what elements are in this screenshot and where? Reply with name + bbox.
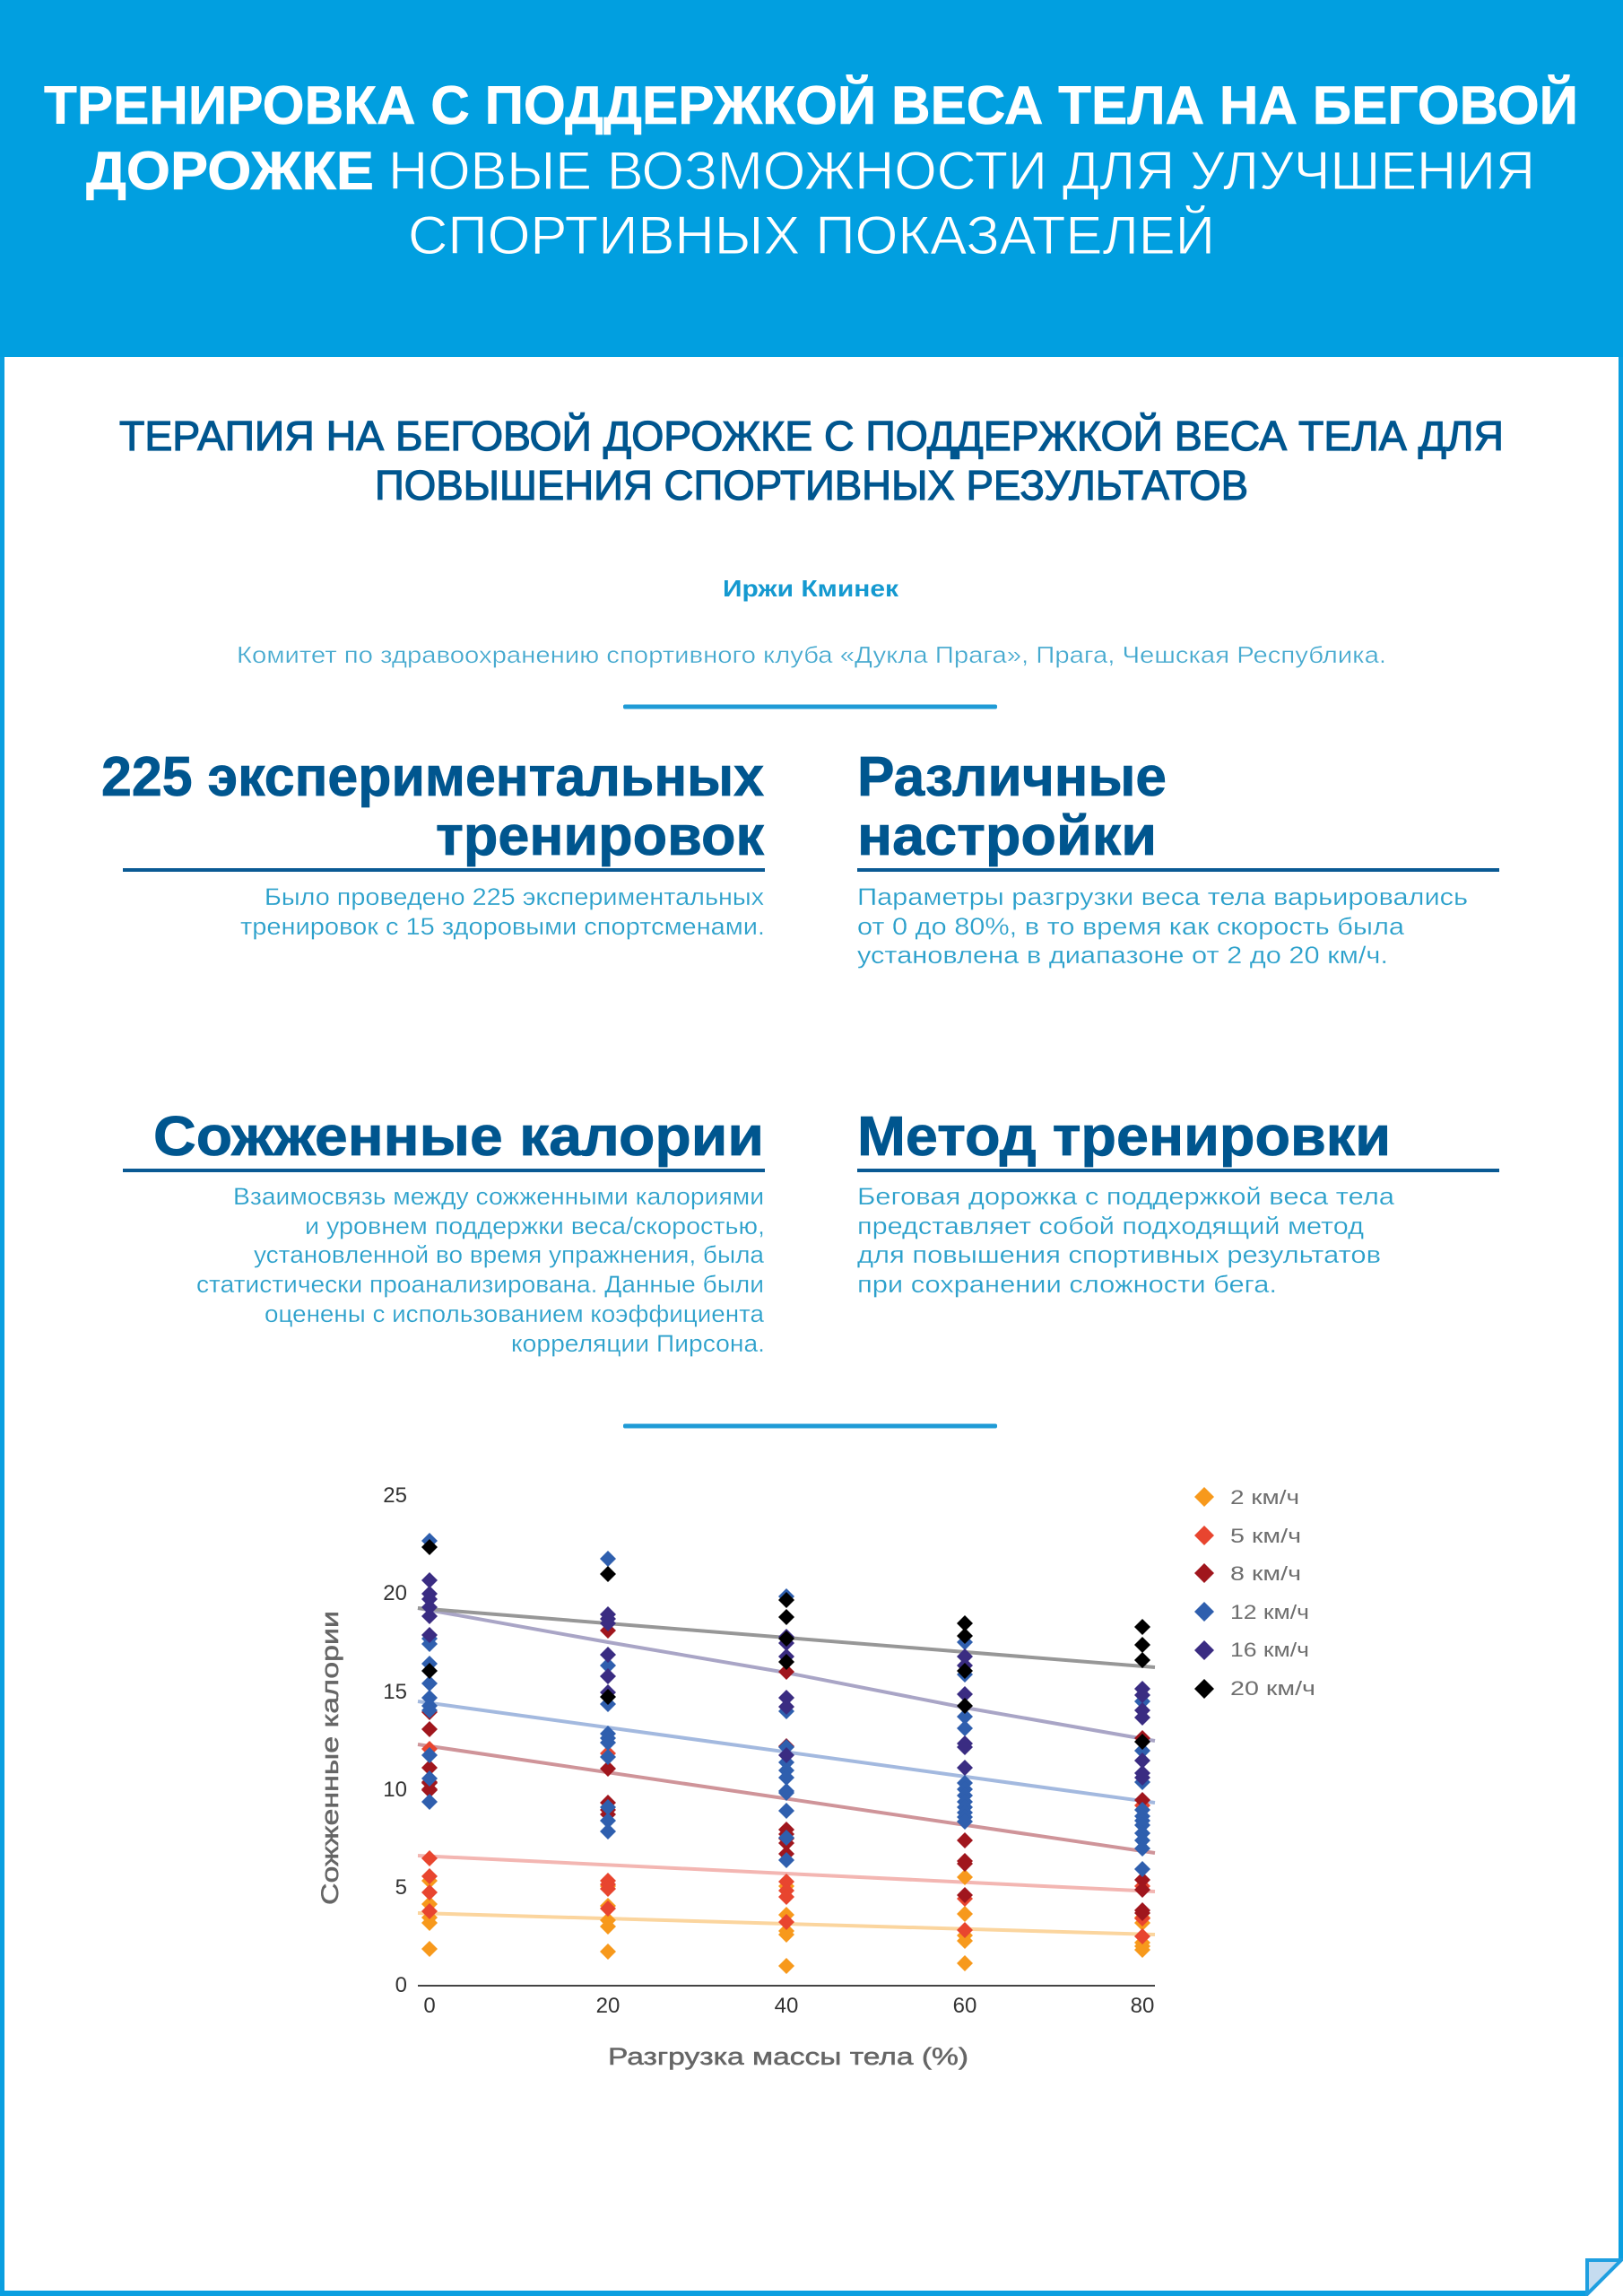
- heading: Различные: [857, 746, 1167, 808]
- x axis line: [418, 1985, 1155, 1987]
- text block: установленной во время упражнения, была: [254, 1241, 765, 1268]
- series: 5 km/h: [421, 1741, 1150, 1944]
- y axis ticks: 15: [383, 1680, 407, 1704]
- text block: [196, 1183, 765, 1357]
- x axis ticks: 80: [1131, 1994, 1154, 2018]
- legend: 12 км/ч: [1230, 1601, 1309, 1623]
- heading: настройки: [857, 805, 1157, 867]
- panel: training method: [857, 1106, 1499, 1298]
- legend: 8 км/ч: [1230, 1562, 1301, 1585]
- affiliation: Комитет по здравоохранению спортивного клуба «Дукла Прага», Прага, Чешская Республика.: [237, 641, 1386, 668]
- text block: оценены с использованием коэффициента: [265, 1300, 765, 1327]
- title: НОВЫЕ ВОЗМОЖНОСТИ ДЛЯ УЛУЧШЕНИЯ: [388, 141, 1535, 201]
- title: СПОРТИВНЫХ ПОКАЗАТЕЛЕЙ: [408, 205, 1215, 265]
- title: [44, 75, 1578, 265]
- text block: Было проведено 225 экспериментальных: [265, 883, 765, 910]
- subtitle: [119, 413, 1504, 509]
- text block: Параметры разгрузки веса тела варьировались: [857, 883, 1468, 910]
- heading: Сожженные калории: [153, 1106, 764, 1168]
- icon: folded page corner: [1587, 2260, 1621, 2294]
- heading: Метод тренировки: [857, 1106, 1391, 1168]
- text block: для повышения спортивных результатов: [857, 1241, 1381, 1268]
- x axis ticks: 60: [953, 1994, 976, 2018]
- y axis ticks: 10: [383, 1778, 407, 1802]
- legend: 16 км/ч: [1230, 1639, 1309, 1661]
- series: 8 km/h: [421, 1622, 1150, 1921]
- x axis ticks: 0: [423, 1994, 436, 2018]
- text block: при сохранении сложности бега.: [857, 1271, 1277, 1298]
- x axis ticks: 40: [775, 1994, 798, 2018]
- author: Иржи Кминек: [723, 575, 899, 602]
- text block: тренировок с 15 здоровыми спортсменами.: [240, 913, 765, 940]
- title: ДОРОЖКЕ: [86, 141, 374, 201]
- y axis ticks: 5: [395, 1875, 407, 1900]
- panel: experimental sessions: [101, 746, 765, 940]
- text block: установлена в диапазоне от 2 до 20 км/ч.: [857, 942, 1388, 969]
- text block: представляет собой подходящий метод: [857, 1213, 1364, 1239]
- panel: burned calories: [123, 1106, 765, 1357]
- scatter chart: [317, 1483, 1155, 2070]
- y axis ticks: [383, 1483, 407, 1997]
- text block: статистически проанализирована. Данные были: [196, 1271, 764, 1298]
- subtitle: ТЕРАПИЯ НА БЕГОВОЙ ДОРОЖКЕ С ПОДДЕРЖКОЙ ВЕСА ТЕЛА ДЛЯ: [119, 413, 1504, 459]
- legend: 20 км/ч: [1230, 1677, 1315, 1700]
- heading: [101, 746, 765, 867]
- y axis ticks: 0: [395, 1973, 407, 1997]
- text block: корреляции Пирсона.: [511, 1330, 765, 1357]
- legend: 5 км/ч: [1230, 1525, 1301, 1547]
- legend: 2 км/ч: [1230, 1486, 1299, 1509]
- series: 16 km/h: [421, 1572, 1150, 1786]
- heading: тренировок: [436, 805, 765, 867]
- y axis title: Сожженные калории: [317, 1611, 343, 1905]
- text block: от 0 до 80%, в то время как скорость была: [857, 913, 1405, 940]
- series: 12 km/h: [421, 1533, 1150, 1877]
- text block: и уровнем поддержки веса/скоростью,: [305, 1213, 765, 1239]
- title: ТРЕНИРОВКА С ПОДДЕРЖКОЙ ВЕСА ТЕЛА НА БЕГОВОЙ: [44, 75, 1578, 135]
- text block: [857, 883, 1468, 969]
- heading: [857, 746, 1167, 867]
- text block: [857, 1183, 1395, 1298]
- subtitle: ПОВЫШЕНИЯ СПОРТИВНЫХ РЕЗУЛЬТАТОВ: [375, 462, 1248, 509]
- trend lines: [418, 1608, 1155, 1935]
- series: 20 km/h: [421, 1539, 1150, 1750]
- header banner: [0, 0, 1623, 357]
- panel: various settings: [857, 746, 1499, 969]
- text block: [240, 883, 765, 940]
- y axis ticks: 20: [383, 1581, 407, 1605]
- x axis ticks: 20: [596, 1994, 620, 2018]
- x axis ticks: [423, 1994, 1154, 2018]
- legend: [1194, 1486, 1315, 1700]
- x axis title: Разгрузка массы тела (%): [608, 2043, 968, 2070]
- y axis ticks: 25: [383, 1483, 407, 1508]
- text block: Взаимосвязь между сожженными калориями: [233, 1183, 764, 1210]
- series: 2 km/h: [421, 1869, 1150, 1974]
- heading: 225 экспериментальных: [101, 746, 764, 808]
- text block: Беговая дорожка с поддержкой веса тела: [857, 1183, 1395, 1210]
